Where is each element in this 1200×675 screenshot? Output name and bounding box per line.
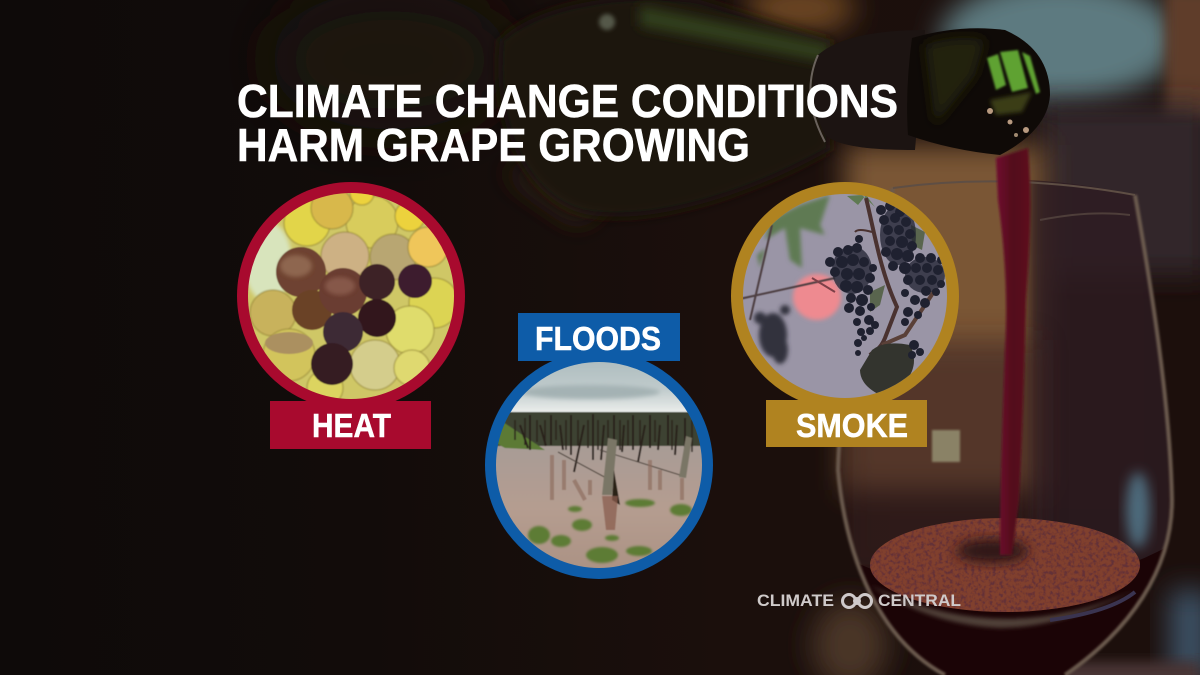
smoke label: SMOKE: [796, 407, 908, 444]
floods label: FLOODS: [535, 320, 661, 357]
title: HARM GRAPE GROWING: [237, 119, 750, 171]
photo: shrivelled grapes: [248, 193, 454, 399]
photo: grapes under smoky sun: [735, 190, 952, 402]
heat label: [270, 401, 431, 449]
photo: flooded vineyard: [490, 360, 710, 571]
title: [237, 75, 898, 171]
floods ring: [485, 351, 713, 579]
bottle: [498, 0, 1050, 217]
wine stream: [996, 148, 1030, 555]
smoke ring: [731, 182, 959, 410]
panel: smoke: [731, 182, 959, 447]
logo: climate central: CENTRAL: [878, 591, 961, 610]
panel: heat: [237, 181, 465, 449]
wine glass: [830, 170, 1180, 675]
title: CLIMATE CHANGE CONDITIONS: [237, 75, 898, 127]
smoke label: [766, 400, 927, 447]
logo: climate central: [757, 591, 961, 610]
heat ring: [237, 182, 465, 410]
heat label: HEAT: [312, 407, 391, 444]
panel: floods: [485, 313, 713, 579]
logo: climate central: CLIMATE: [757, 591, 834, 610]
floods label: [518, 313, 680, 361]
